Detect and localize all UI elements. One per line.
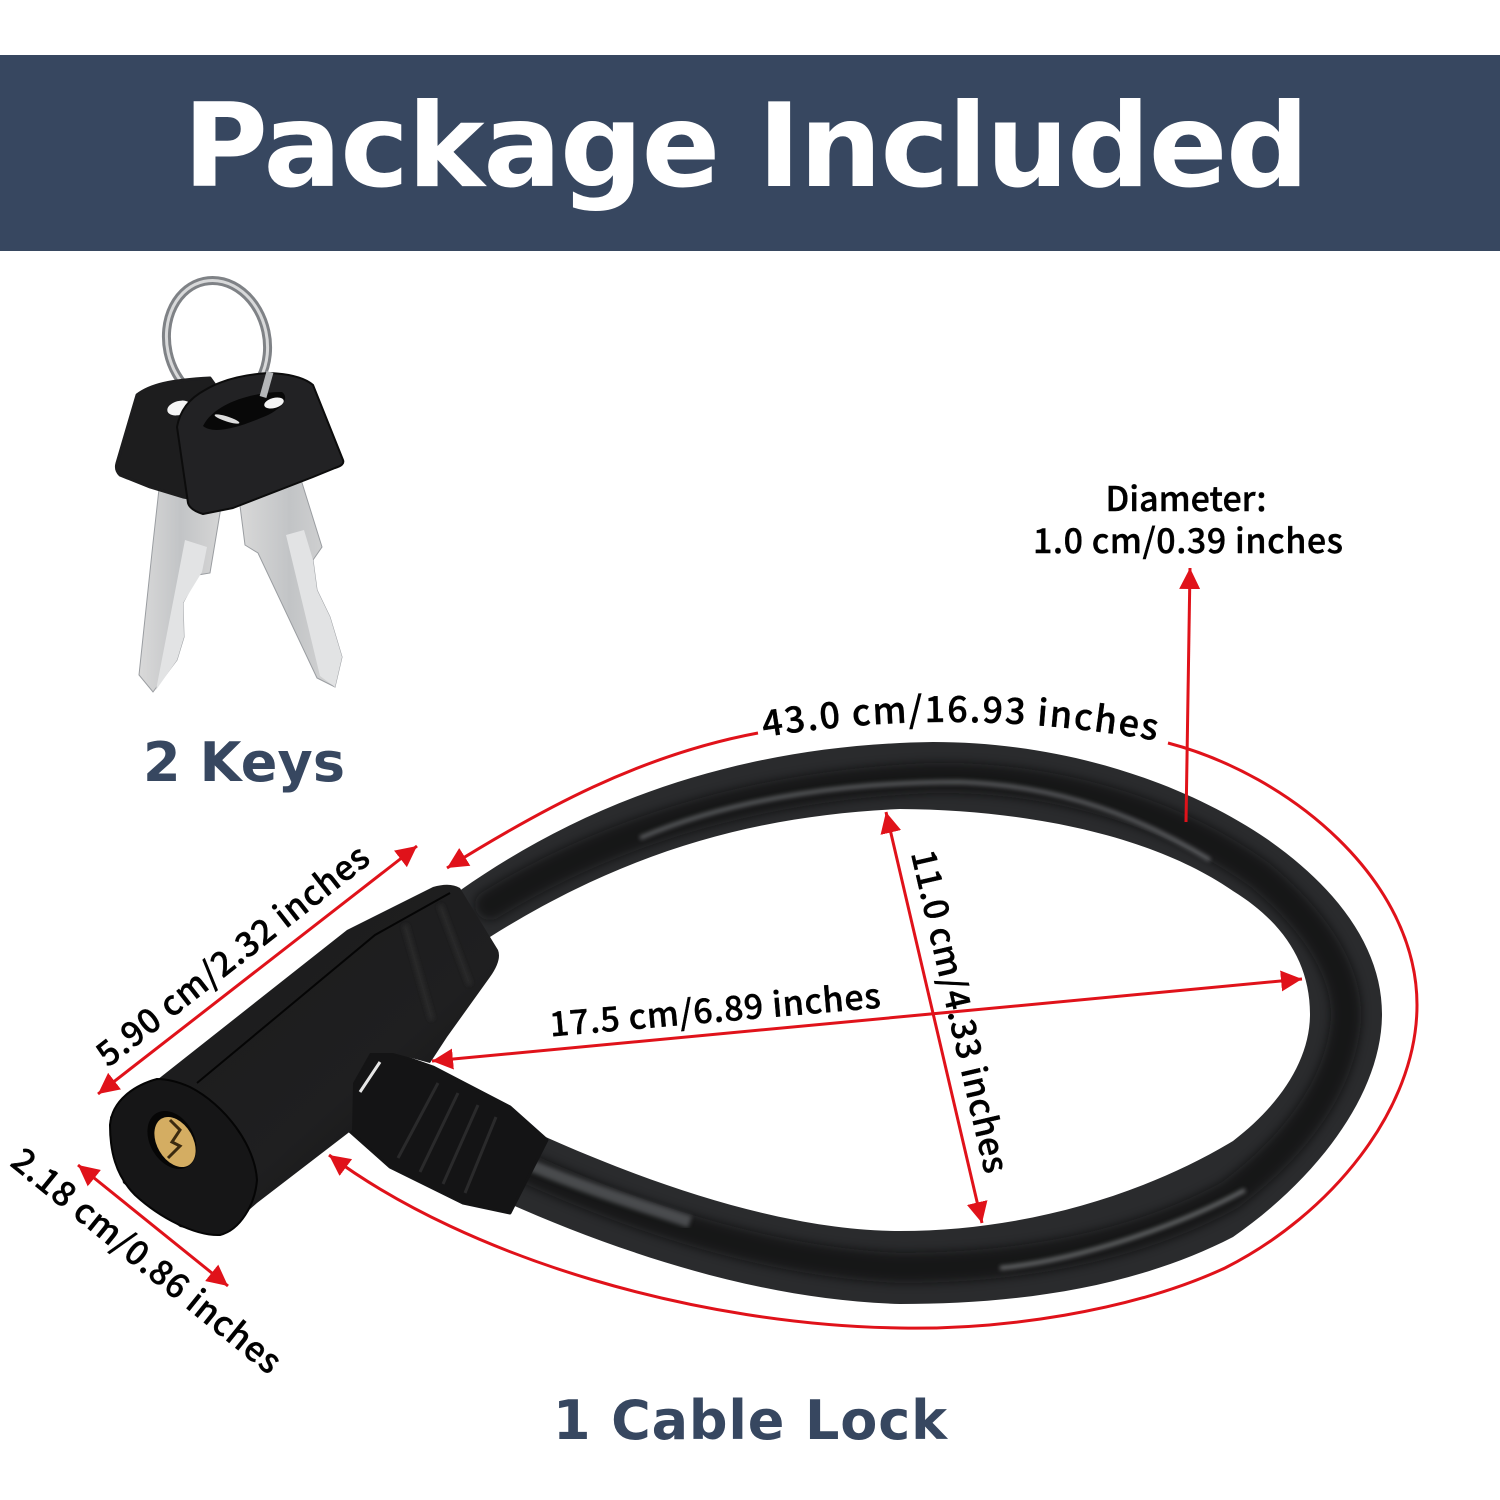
cable lock label: 1 Cable Lock xyxy=(553,1389,948,1452)
dimension arrows xyxy=(78,568,1417,1328)
lock body xyxy=(110,885,499,1235)
lock length label: 5.90 cm/2.32 inches xyxy=(84,831,378,1076)
icon: cable lock xyxy=(110,742,1382,1304)
lock face xyxy=(110,1079,257,1235)
cable shading xyxy=(490,778,1346,1268)
length label: 43.0 cm/16.93 inches xyxy=(763,693,1158,740)
width label: 17.5 cm/6.89 inches xyxy=(547,969,882,1046)
lock diameter label: 2.18 cm/0.86 inches xyxy=(3,1134,294,1383)
height label: 11.0 cm/4.33 inches xyxy=(901,844,1023,1177)
diameter label: 1.0 cm/0.39 inches xyxy=(1033,514,1343,563)
rear collar xyxy=(345,1053,547,1213)
keyhole xyxy=(146,1110,204,1174)
cable xyxy=(440,742,1382,1304)
title banner xyxy=(0,55,1500,251)
diameter label: Diameter: xyxy=(1106,472,1266,521)
title: Package Included xyxy=(183,79,1309,214)
keys label: 2 Keys xyxy=(143,731,345,794)
icon: two keys on a ring xyxy=(116,271,343,692)
